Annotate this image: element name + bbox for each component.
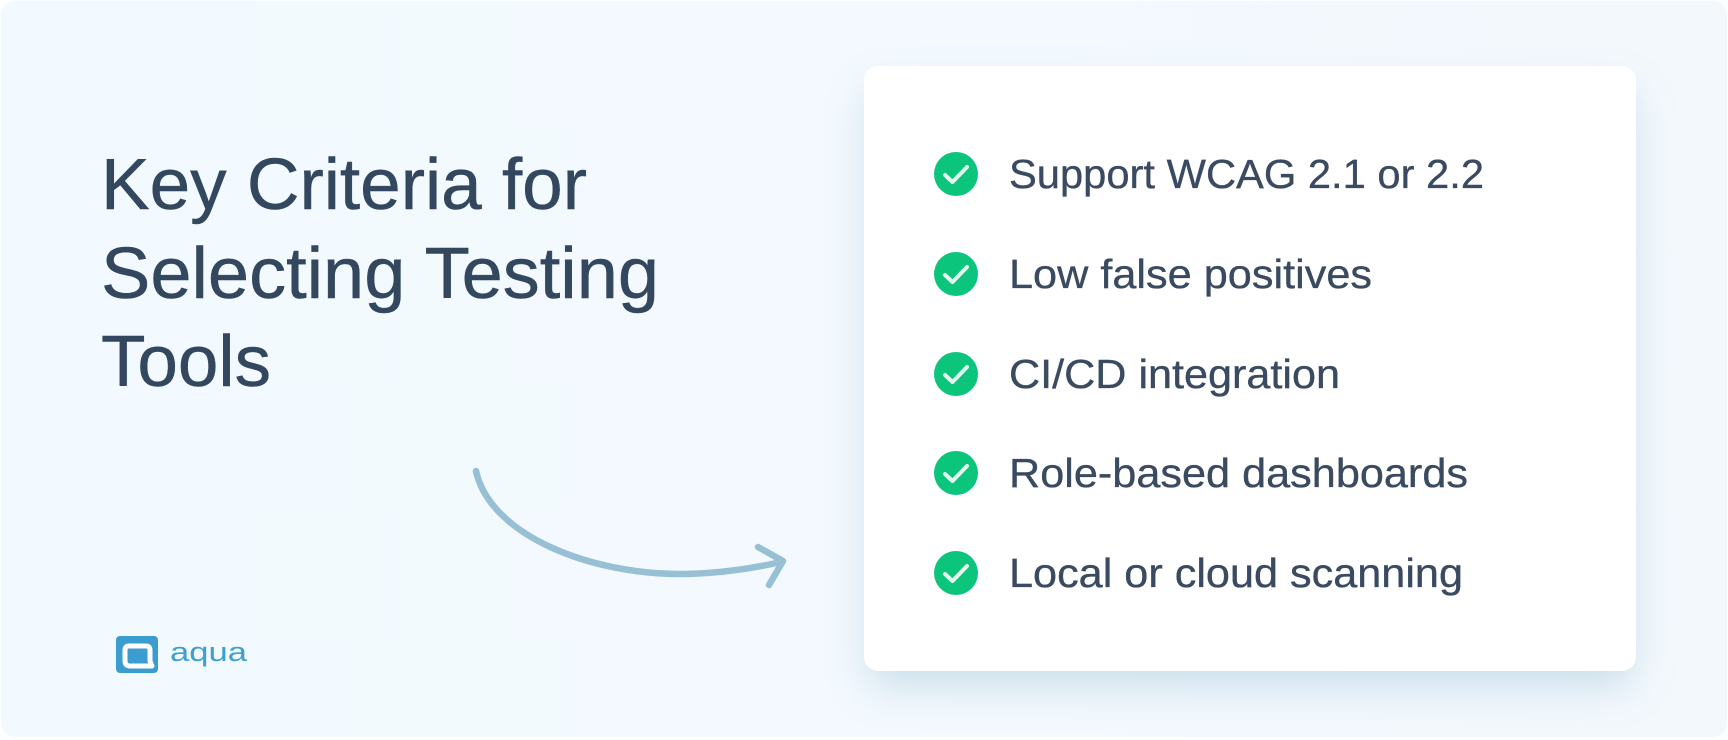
criterion: CI/CD integration: CI/CD integration <box>1009 351 1340 397</box>
criterion: Low false positives: Low false positives <box>1009 251 1372 297</box>
criterion: Support WCAG: Support WCAG 2.1 or 2.2 <box>1009 151 1484 197</box>
logo icon <box>116 636 158 673</box>
arrow <box>476 471 783 585</box>
title: Key Criteria for <box>101 145 587 225</box>
criterion: Local or cloud scanning: Local or cloud scanning <box>1009 550 1463 596</box>
criterion: Role-based dashboards: Role-based dashboards <box>1009 450 1468 496</box>
title: Tools <box>101 322 271 402</box>
logo wordmark: aqua <box>170 637 248 667</box>
card surface <box>864 66 1636 671</box>
title <box>101 145 659 402</box>
title: Selecting Testing <box>101 234 659 314</box>
card shadow <box>868 90 1632 686</box>
panel: criteria card <box>864 66 1636 686</box>
logo: aqua <box>116 636 248 673</box>
